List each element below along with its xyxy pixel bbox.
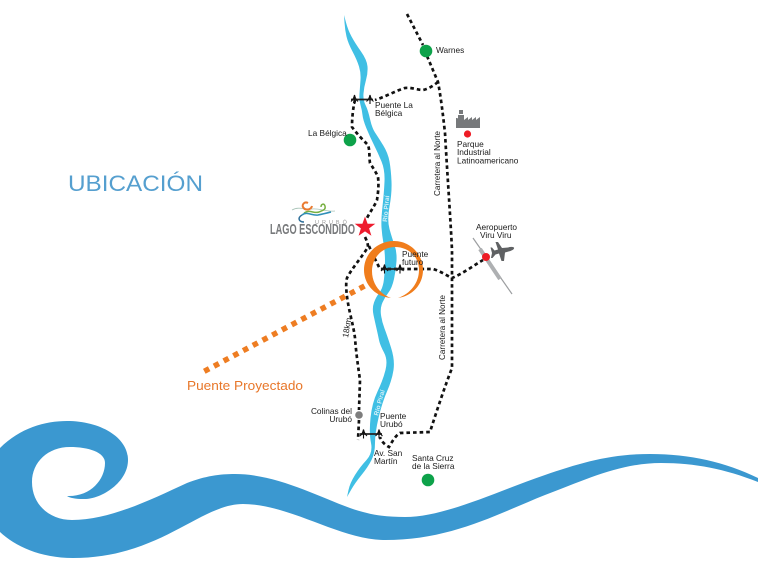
label: Aeropuerto Viru Viru: Viru Viru [480, 230, 512, 240]
wave [0, 421, 758, 558]
icon: red star [355, 216, 375, 236]
label: Puente futuro: Puente [402, 249, 428, 259]
label: Santa Cruz de la Sierra: Santa Cruz [412, 453, 454, 463]
marker: La Bélgica [344, 134, 356, 146]
marker: Parque Industrial [464, 130, 471, 138]
label: Puente Urubó: Urubó [380, 419, 403, 429]
road: Carretera al Norte [380, 14, 452, 447]
logo: Lago Escondido: URUBÓ [315, 219, 350, 226]
orange circle [364, 241, 423, 298]
label: Colinas del Urubó: Urubó [329, 414, 352, 424]
label: Puente Proyectado: Puente Proyectado [187, 378, 303, 393]
road: west side [346, 100, 378, 440]
icon: factory [456, 110, 480, 128]
logo: Lago Escondido: LAGO ESCONDIDO [270, 221, 355, 238]
bridge: Puente Urubó [360, 430, 382, 438]
label: La Bélgica: La Bélgica [308, 128, 347, 138]
marker: Santa Cruz de la Sierra [422, 474, 434, 486]
label: Aeropuerto Viru Viru: Aeropuerto [476, 222, 517, 232]
label: Av. San Martín: Martín [374, 456, 398, 466]
river: Río Piraí [344, 15, 397, 497]
river: Río Piraí: Río Piraí [382, 195, 391, 222]
label: Puente La Bélgica: Bélgica [375, 108, 403, 118]
road: Puente La Bélgica connector [375, 82, 438, 100]
logo: Lago Escondido [270, 202, 355, 238]
label: Warnes: Warnes [436, 45, 464, 55]
marker: Warnes [420, 45, 432, 57]
label: Carretera al Norte (south): Carretera al Norte [437, 295, 447, 360]
icon: runway [473, 238, 512, 294]
label: Carretera al Norte (north): Carretera al Norte [432, 131, 442, 196]
label: Colinas del Urubó: Colinas del [311, 406, 352, 416]
icon: airplane [490, 242, 514, 261]
bridge: Puente futuro [381, 264, 404, 274]
river: Río Piraí: Río Piraí [373, 389, 387, 417]
label: Av. San Martín: Av. San [374, 448, 402, 458]
title: UBICACIÓN [68, 171, 203, 196]
label: Aeropuerto Viru Viru [476, 222, 517, 240]
label: 18km: 18km [340, 317, 353, 338]
label: Parque Industrial Latinoamericano: Latinoamericano [457, 155, 519, 165]
label: Puente futuro: futuro [402, 257, 424, 267]
label: Puente Urubó: Puente [380, 411, 406, 421]
marker: Colinas del Urubó [355, 411, 363, 419]
label: Parque Industrial Latinoamericano: Parque [457, 139, 484, 149]
bridge: Puente La Bélgica [351, 95, 374, 104]
road: Puente futuro connector [369, 246, 483, 278]
label: Parque Industrial Latinoamericano: Industrial [457, 147, 491, 157]
orange projected bridge line [203, 286, 364, 372]
label: Puente La Bélgica: Puente La [375, 100, 413, 110]
marker: airport [482, 253, 490, 261]
label: Santa Cruz de la Sierra: de la Sierra [412, 461, 455, 471]
